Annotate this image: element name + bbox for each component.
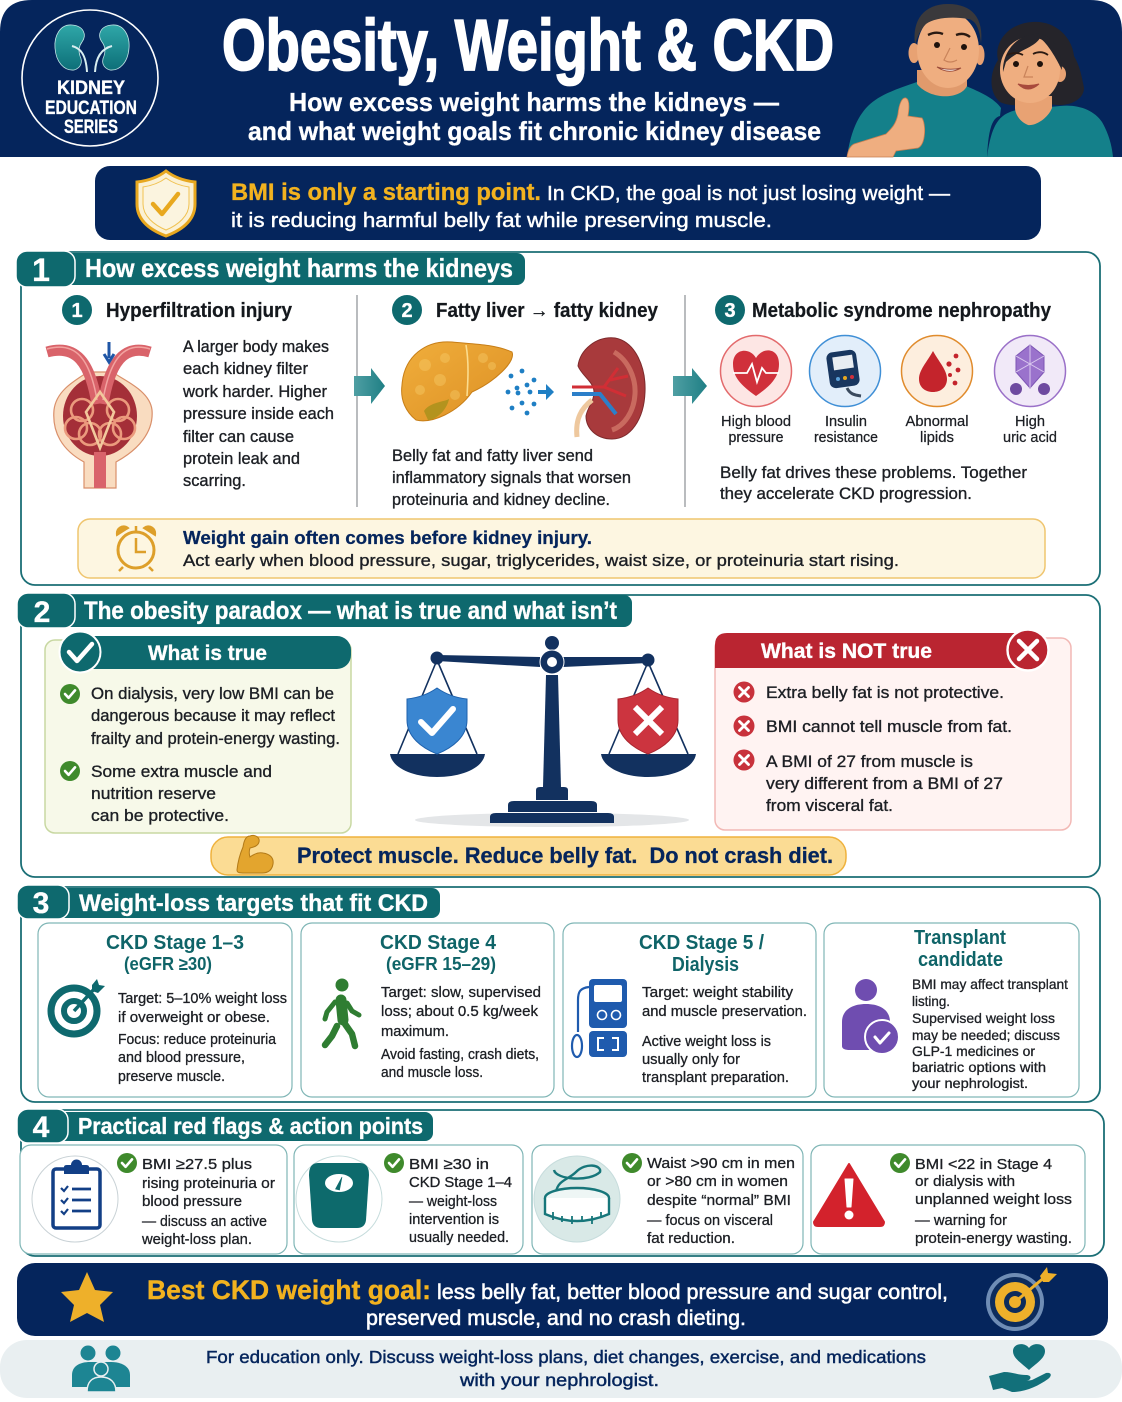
- arrow 1 to 2: [354, 368, 385, 404]
- text: BMI 30: usually needed.: [409, 1229, 509, 1246]
- callout text: it is reducing harmful belly fat while preserving muscle.: [231, 209, 772, 232]
- icon: gold shield with check: [137, 171, 195, 236]
- subtitle: How excess weight harms the kidneys —: [289, 87, 779, 117]
- header: what is not true: [715, 630, 1048, 670]
- text: BMI 30: [409, 1156, 512, 1246]
- text: stage 5: and muscle preservation.: [642, 1004, 807, 1020]
- icon: group of people: [72, 1346, 130, 1392]
- text: low BMI: — warning for: [915, 1212, 1007, 1229]
- text: metabolic syndrome: [720, 463, 1027, 503]
- text: hyperfiltration: A larger body makes: [183, 337, 329, 356]
- badge: Kidney Education Series: SERIES: [64, 117, 118, 138]
- icon: glomerulus illustration: [47, 342, 152, 488]
- not-true item: BMI of 27: very different from a BMI of 27: [766, 774, 1003, 793]
- card: CKD stage 1-3: (eGFR ≥30): [124, 954, 212, 974]
- callout text: In CKD, the goal is not just losing weight —: [547, 182, 951, 205]
- panel: section 3 weight-loss targets: [17, 885, 1100, 1102]
- card: CKD stage 5 / dialysis: CKD Stage 5 /: [639, 932, 764, 954]
- banner text: [147, 1275, 948, 1330]
- text: stage 5: [642, 985, 807, 1086]
- true item: low BMI on dialysis: On dialysis, very low BMI can be: [91, 684, 334, 703]
- text: hyperfiltration: scarring.: [183, 471, 246, 490]
- icon: hand holding heart: [989, 1344, 1051, 1392]
- badge: Kidney Education Series: KIDNEY: [57, 78, 125, 99]
- icon: high uric acid: High: [1015, 414, 1045, 430]
- text: stage 1-3: and blood pressure,: [118, 1050, 245, 1066]
- card: waist size: [532, 1145, 803, 1254]
- panel: section 1 how excess weight harms the kidneys: [16, 251, 1100, 585]
- section 2 heading: [17, 593, 632, 629]
- sub-panel: metabolic syndrome nephropathy: Metabolic syndrome nephropathy: [752, 300, 1052, 322]
- panel: what is true: [45, 632, 351, 833]
- footer: [0, 1340, 1122, 1398]
- text: stage 1-3: Focus: reduce proteinuria: [118, 1032, 277, 1048]
- card: CKD stage 4: (eGFR 15–29): [386, 954, 496, 974]
- text: stage 4: Target: slow, supervised: [381, 985, 541, 1001]
- text: stage 1-3: if overweight or obese.: [118, 1010, 270, 1026]
- banner text: less belly fat, better blood pressure and sugar control,: [437, 1280, 948, 1304]
- callout: BMI is only a starting point: [95, 166, 1041, 240]
- icon: high uric acid: uric acid: [1003, 430, 1057, 446]
- icon: alarm clock: [117, 526, 155, 571]
- badge: Kidney Education Series: [22, 10, 158, 146]
- section 2 heading: The obesity paradox — what is true and what isn’t: [84, 597, 618, 625]
- card: transplant candidate: Transplant: [914, 927, 1006, 949]
- icon: target: [51, 979, 105, 1034]
- card: low BMI warning: [811, 1145, 1085, 1254]
- header band: [0, 0, 1122, 157]
- text: transplant: your nephrologist.: [912, 1075, 1028, 1091]
- true item: muscle and nutrition reserve: Some extra muscle and: [91, 762, 272, 781]
- callout: protect muscle pill: Protect muscle. Reduce belly fat. Do not crash diet.: [297, 843, 833, 868]
- panel: section 4 practical red flags: [17, 1109, 1104, 1256]
- text: low BMI: protein-energy wasting.: [915, 1230, 1072, 1247]
- not-true item: belly fat: Extra belly fat is not protective.: [766, 683, 1004, 702]
- banner text: Best CKD weight goal:: [147, 1275, 431, 1305]
- not-true item: BMI of 27: from visceral fat.: [766, 796, 893, 815]
- text: transplant: GLP-1 medicines or: [912, 1043, 1035, 1059]
- true item: low BMI on dialysis: frailty and protein-energy wasting.: [91, 729, 340, 748]
- sub-panel: fatty liver to fatty kidney: Fatty liver → fatty kidney: [436, 300, 659, 322]
- man: [847, 4, 1001, 157]
- illustration: smiling couple: [847, 4, 1113, 157]
- sub-panel: fatty liver to fatty kidney: 2: [401, 300, 413, 322]
- icon: inflammatory signal dots and arrow: [506, 369, 554, 415]
- icon: high blood pressure: pressure: [728, 430, 784, 446]
- section 1 heading: How excess weight harms the kidneys: [85, 253, 513, 283]
- icon: insulin resistance: resistance: [814, 430, 878, 446]
- callout text: [183, 527, 899, 570]
- section 3 heading: 3: [33, 887, 49, 920]
- section 3 heading: [17, 885, 440, 920]
- icon: insulin resistance: Insulin: [825, 414, 867, 430]
- callout text: BMI is only a starting point.: [231, 179, 541, 206]
- text: fatty liver: [392, 446, 631, 509]
- title: Obesity, Weight & CKD: [222, 6, 834, 86]
- card: CKD stage 4: CKD Stage 4: [380, 932, 497, 954]
- sub-panel: hyperfiltration injury: [47, 295, 334, 490]
- header: what is true: [60, 632, 351, 672]
- true item: muscle and nutrition reserve: nutrition reserve: [91, 784, 216, 803]
- text: waist size: [647, 1155, 795, 1247]
- section 1 heading: 1: [32, 252, 50, 288]
- arrow 2 to 3: [673, 368, 707, 404]
- text: transplant: may be needed; discuss: [912, 1027, 1060, 1043]
- true item: low BMI on dialysis: [60, 684, 340, 748]
- section 4 heading: 4: [33, 1111, 50, 1144]
- header: what is true: What is true: [148, 642, 267, 665]
- section 4 heading: [17, 1109, 433, 1144]
- text: transplant: BMI may affect transplant: [912, 976, 1068, 992]
- callout: protect muscle pill: [211, 835, 846, 875]
- text: stage 5: Target: weight stability: [642, 985, 794, 1001]
- card: BMI 30: [294, 1145, 523, 1254]
- text: waist size: Waist >90 cm in men: [647, 1155, 795, 1172]
- text: BMI 30: — weight-loss: [409, 1193, 497, 1210]
- text: BMI 27.5: blood pressure: [142, 1193, 242, 1210]
- card: transplant candidate: candidate: [918, 949, 1003, 971]
- text: stage 1-3: preserve muscle.: [118, 1069, 225, 1085]
- sub-panel: metabolic syndrome nephropathy: 3: [724, 300, 736, 322]
- text: waist size: — focus on visceral: [647, 1212, 773, 1229]
- icon: measuring tape: [534, 1156, 620, 1242]
- text: transplant: Supervised weight loss: [912, 1010, 1055, 1026]
- icon: dialysis machine: [572, 979, 627, 1057]
- section 4 heading: Practical red flags & action points: [78, 1113, 423, 1139]
- text: transplant: listing.: [912, 993, 950, 1009]
- text: BMI 27.5: weight-loss plan.: [141, 1231, 252, 1248]
- text: low BMI: or dialysis with: [915, 1173, 1015, 1190]
- banner: best CKD weight goal: [17, 1263, 1108, 1336]
- subtitle: [248, 87, 821, 146]
- icon: abnormal lipids: lipids: [920, 430, 954, 446]
- text: stage 5: Active weight loss is: [642, 1034, 771, 1050]
- text: BMI 30: CKD Stage 1–4: [409, 1174, 512, 1191]
- callout text: Weight gain often comes before kidney injury.: [183, 527, 592, 548]
- card: CKD stage 5 / dialysis: Dialysis: [672, 954, 739, 976]
- subtitle: and what weight goals fit chronic kidney disease: [248, 116, 821, 146]
- text: stage 1-3: [118, 991, 287, 1085]
- section 2 heading: 2: [34, 596, 50, 629]
- card: BMI 27.5: [20, 1145, 287, 1254]
- text: metabolic syndrome: they accelerate CKD progression.: [720, 484, 972, 503]
- icon: person with check: [842, 979, 899, 1054]
- sub-panel: fatty liver to fatty kidney: [392, 295, 659, 509]
- section 3 heading: Weight-loss targets that fit CKD: [79, 890, 428, 917]
- banner text: preserved muscle, and no crash dieting.: [366, 1306, 746, 1330]
- text: low BMI: [915, 1156, 1072, 1247]
- true item: muscle and nutrition reserve: can be protective.: [91, 806, 229, 825]
- sub-panel: hyperfiltration injury: Hyperfiltration injury: [106, 300, 293, 322]
- text: transplant: bariatric options with: [912, 1059, 1046, 1075]
- text: waist size: despite “normal” BMI: [647, 1192, 791, 1209]
- card: transplant candidate: [824, 923, 1079, 1097]
- icon: insulin resistance: [810, 336, 880, 446]
- text: hyperfiltration: protein leak and: [183, 449, 300, 468]
- icon: clipboard checklist: [32, 1156, 118, 1242]
- icon: high blood pressure: High blood: [721, 414, 791, 430]
- text: hyperfiltration: work harder. Higher: [182, 382, 327, 401]
- card: CKD stage 1-3: CKD Stage 1–3: [106, 932, 244, 954]
- icon: fatty liver: [402, 342, 512, 421]
- callout text: Act early when blood pressure, sugar, triglycerides, waist size, or proteinuria start rising.: [183, 551, 899, 570]
- icon: flexed muscle: [237, 835, 273, 873]
- footer text: with your nephrologist.: [459, 1370, 659, 1390]
- icon: walking person: [325, 978, 359, 1046]
- text: stage 4: loss; about 0.5 kg/week: [381, 1004, 539, 1020]
- text: BMI 27.5: rising proteinuria or: [142, 1175, 275, 1192]
- icon: high uric acid: [994, 336, 1066, 446]
- text: fatty liver: proteinuria and kidney decline.: [392, 490, 610, 509]
- sub-panel: hyperfiltration injury: 1: [71, 300, 83, 322]
- text: hyperfiltration: filter can cause: [183, 427, 294, 446]
- footer text: [206, 1347, 926, 1390]
- text: waist size: or >80 cm in women: [647, 1173, 788, 1190]
- text: BMI 30: intervention is: [409, 1211, 499, 1228]
- header: what is not true: What is NOT true: [761, 640, 932, 663]
- text: stage 4: and muscle loss.: [381, 1065, 483, 1081]
- text: stage 1-3: Target: 5–10% weight loss: [118, 991, 287, 1007]
- text: BMI 27.5: [141, 1156, 275, 1248]
- text: hyperfiltration: [182, 337, 334, 490]
- text: stage 4: Avoid fasting, crash diets,: [381, 1047, 539, 1063]
- text: low BMI: BMI <22 in Stage 4: [915, 1156, 1052, 1173]
- text: BMI 27.5: BMI ≥27.5 plus: [142, 1156, 252, 1173]
- card: CKD stage 4: [301, 923, 554, 1097]
- icon: abnormal lipids: [902, 336, 972, 446]
- badge: Kidney Education Series: EDUCATION: [45, 98, 137, 119]
- icon: kidney: [572, 338, 645, 439]
- text: transplant: [912, 976, 1068, 1091]
- section 1 heading: [16, 251, 525, 288]
- text: fatty liver: inflammatory signals that worsen: [392, 468, 631, 487]
- text: stage 5: transplant preparation.: [642, 1070, 789, 1086]
- text: stage 5: usually only for: [642, 1052, 740, 1068]
- text: hyperfiltration: each kidney filter: [183, 359, 308, 378]
- card: CKD stage 5 / dialysis: [563, 923, 816, 1097]
- icon: bathroom scale: [296, 1156, 382, 1242]
- icon: high blood pressure: [720, 336, 792, 446]
- text: hyperfiltration: pressure inside each: [183, 404, 334, 423]
- panel: section 2 the obesity paradox: [17, 593, 1100, 877]
- not-true item: BMI muscle vs fat: BMI cannot tell muscle from fat.: [766, 717, 1012, 736]
- icon: warning triangle: [814, 1164, 884, 1226]
- text: metabolic syndrome: Belly fat drives these problems. Together: [720, 463, 1027, 482]
- text: fatty liver: Belly fat and fatty liver send: [392, 446, 593, 465]
- sub-panel: metabolic syndrome nephropathy: [715, 295, 1066, 503]
- true item: muscle and nutrition reserve: [60, 761, 272, 825]
- text: stage 4: maximum.: [381, 1024, 449, 1040]
- text: stage 4: [381, 985, 541, 1081]
- text: BMI 30: BMI ≥30 in: [409, 1156, 489, 1173]
- text: waist size: fat reduction.: [647, 1230, 735, 1247]
- callout text: [231, 179, 951, 232]
- not-true item: BMI of 27: [734, 750, 1003, 815]
- not-true item: BMI of 27: A BMI of 27 from muscle is: [766, 752, 973, 771]
- true item: low BMI on dialysis: dangerous because it may reflect: [91, 706, 335, 725]
- icon: balance scale with shields: [390, 636, 696, 827]
- icon: abnormal lipids: Abnormal: [906, 414, 968, 430]
- text: BMI 27.5: — discuss an active: [142, 1213, 267, 1230]
- woman: [987, 22, 1113, 157]
- callout: weight gain often comes before kidney injury: [78, 519, 1045, 578]
- text: low BMI: unplanned weight loss: [915, 1191, 1072, 1208]
- icon: gold star: [61, 1272, 113, 1322]
- footer text: For education only. Discuss weight-loss plans, diet changes, exercise, and medications: [206, 1347, 926, 1367]
- icon: gold target with arrow: [986, 1267, 1057, 1331]
- panel: what is not true: [715, 630, 1071, 830]
- thumbs-up hand: [847, 98, 925, 157]
- card: CKD stage 1-3: [38, 923, 292, 1097]
